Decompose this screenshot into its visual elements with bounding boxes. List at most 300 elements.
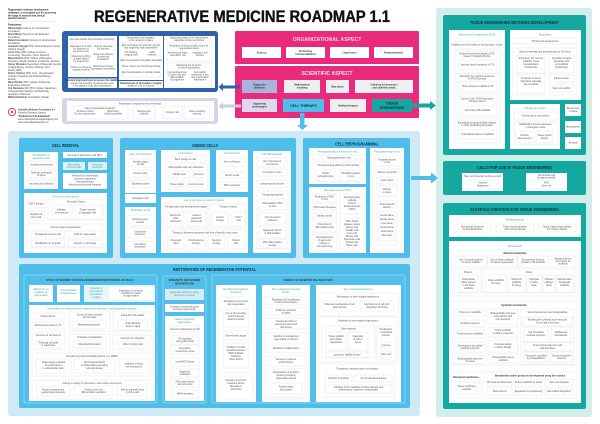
panel: cell reprogramming: Identity control xyxy=(317,214,332,218)
biomaterials: scaffolds xyxy=(498,360,508,362)
panel: tissue engineering background xyxy=(436,8,592,417)
panel: cell removal: Removal by mitochondria xyxy=(72,174,99,178)
sub-panel: therapy at effector level: Development of synthetic xyxy=(273,371,300,374)
panel: diagnostics: in the patient's body after implantation xyxy=(73,84,112,88)
sub-panel: epigenetic and genome reprogramming: for tissue regeneration xyxy=(173,308,197,311)
biomaterials: in tissue therapy xyxy=(495,346,512,349)
panel: diagnostics: Immunophenotype xyxy=(167,71,187,74)
panel: diagnostics: Monitoring of cell migration xyxy=(127,36,155,40)
biomaterials: scaffolds xyxy=(464,288,474,290)
panel: cell reprogramming: Muscle cells xyxy=(346,236,359,238)
sub-panel: therapy at effector level: organization xyxy=(330,341,343,344)
biomaterials: Biological membranes xyxy=(453,376,479,379)
panel: cell reprogramming: Factors in xyxy=(319,242,330,245)
sub-panel: study of rejuvenation factors: Reducing cell death xyxy=(38,342,59,344)
sub-panel: therapy at effector level: and EV-derived xyxy=(228,315,245,318)
sub-panel: epigenetic and genome reprogramming: RA signaling xyxy=(179,338,192,340)
panel: cell reprogramming: iPSC-based therapies xyxy=(313,206,337,209)
biomaterials: Tissue scaffolds xyxy=(495,330,512,332)
panel: adding cells: Cell differentiation xyxy=(262,153,283,156)
sub-panel: study of rejuvenation factors: Transport of metabolites xyxy=(77,336,103,339)
panel: tissue engineering methods: Bioprinting xyxy=(539,34,552,36)
panel: cell reprogramming: Blood cells xyxy=(346,245,358,247)
panel: cell removal: of senescent xyxy=(55,212,68,214)
sub-panel: therapy at effector level: MMP inhibitors xyxy=(228,352,244,355)
panel: adding cells: cells xyxy=(236,220,242,222)
biomaterials: for tissue xyxy=(465,360,475,363)
panel: cell reprogramming: Muscle tissue xyxy=(380,218,395,221)
panel: scientific aspect: Healing therapies xyxy=(338,104,359,108)
sub-panel: therapy at effector level: tissue factors xyxy=(229,358,244,361)
panel: cell reprogramming: to tissue xyxy=(383,191,392,194)
sidebar: authors and intro: University of Moscow) xyxy=(8,93,30,96)
panel: tissue engineering methods: New bio-materials and developments for 3D tissue xyxy=(519,50,571,54)
panel: adding cells: Therapy of diseases associated with loss of specific tissue types xyxy=(172,232,239,234)
panel: diagnostics: and functional activity of regenerative cells xyxy=(70,82,114,85)
panel: cell reprogramming: Reprogramming efficiency and specificity xyxy=(318,164,360,167)
panel: cell reprogramming: Vector types xyxy=(381,179,394,182)
panel: adding cells: Viability tests xyxy=(172,173,187,176)
panel: tissue engineering methods: Natural tissue engineering (NTE) xyxy=(459,34,495,36)
sub-panel: study of rejuvenation factors: Mechanical impacts on TF xyxy=(35,324,62,327)
panel: preparation of regenerative tools: Preparation of regions for the cell therapy xyxy=(119,102,162,106)
biomaterials: Natural polymers xyxy=(554,258,573,260)
panel: adding cells: Adult cells xyxy=(170,220,182,223)
footer: foundation logo and contact: Scientific Medicine Foundation for xyxy=(18,108,55,112)
panel: adding cells: Stem cell factors xyxy=(224,160,241,164)
panel: diagnostics: Monitoring the dynamics xyxy=(177,64,202,67)
panel: cells for use in tissue engineering: CELLS FOR USE IN TISSUE ENGINEERING xyxy=(477,165,552,170)
biomaterials: of cell, tissue functions xyxy=(536,322,560,324)
sub-panel: study of rejuvenation factors: condition on xyxy=(34,291,48,294)
sidebar: authors and intro: Russia) xyxy=(8,79,16,81)
panel: cells for use in tissue engineering: for patient-specific xyxy=(537,176,557,180)
panel: diagnostics: Single-cell analysis xyxy=(93,54,114,56)
sub-panel: therapy at effector level: of transplant xyxy=(380,331,393,334)
panel: scientific aspect: and synthetic media xyxy=(373,86,396,90)
decellularization: Decellularization xyxy=(506,218,525,222)
panel: adding cells: survival xyxy=(136,221,144,224)
biomaterials: Biomaterials xyxy=(508,245,523,248)
panel: cell removal: Removal of tissue xyxy=(67,200,86,204)
sub-panel: study of rejuvenation factors: Chronological factors xyxy=(84,361,106,364)
panel: cell removal: tumor cells xyxy=(30,216,42,219)
sub-panel: therapy at effector level: Secretory cytokines xyxy=(276,358,297,361)
panel: tissue engineering methods: Properties of tissue xyxy=(521,77,542,80)
panel: adding cells: Cell tests xyxy=(194,173,204,176)
panel: preparation of regenerative tools: systems xyxy=(193,112,202,116)
biomaterials: collagen xyxy=(545,282,554,284)
sub-panel: therapy at effector level: Use of microvesicles xyxy=(225,312,247,315)
panel: diagnostics: Tissue-on-chip and xyxy=(71,67,91,69)
panel: tissue engineering methods: Soft tissue NTE scaffolds xyxy=(465,109,491,112)
panel: scientific aspect: Data bases xyxy=(331,86,344,88)
biomaterials: for tissue regeneration xyxy=(491,261,514,264)
biomaterials: fibers xyxy=(546,284,553,287)
panel: scientific aspect: technologies xyxy=(252,106,268,108)
arrow: cell therapy to tissue engineering xyxy=(411,172,438,184)
panel: organizational aspect: ORGANIZATIONAL ASPECT xyxy=(293,37,362,43)
sub-panel: study of rejuvenation factors: Mitochondrial function xyxy=(78,343,101,346)
biomaterials: cells and tissue xyxy=(540,347,556,350)
panel: cell reprogramming: in vitro xyxy=(321,198,329,201)
sub-panel: therapy at effector level: integration with tissue xyxy=(366,306,389,309)
panel: cells for use in tissue engineering: iPSC xyxy=(544,182,549,184)
panel: cell removal: Tissue removal xyxy=(80,208,96,212)
biomaterials: in structural xyxy=(463,284,475,287)
panel: cell removal: Inhibition xyxy=(57,208,67,212)
sub-panel: study of rejuvenation factors: Change in activity of processes in stem niche environment xyxy=(62,382,122,385)
sub-panel: therapy at effector level: regenerative factors xyxy=(276,377,297,380)
sub-panel: therapy at effector level: Stem implant dependence xyxy=(343,288,373,291)
sidebar: authors and intro: roadmap is a conceptual tool for assessing xyxy=(8,12,56,14)
sub-panel: study of rejuvenation factors: STUDY OF RESIDENT FACTORS ON REGENERATIVE POTENTIAL OF CELLS xyxy=(46,279,134,282)
panel: cell reprogramming: iPSC-based xyxy=(346,221,359,223)
panel: cell removal: Depletion of xyxy=(30,213,42,216)
panel: cell reprogramming: Transdifferentiation xyxy=(341,172,361,175)
panel: cell reprogramming: Reprogramming xyxy=(316,236,333,239)
panel: tissue engineering methods: Enhancing: 3D, cell-free xyxy=(519,57,544,60)
biomaterials: Chitosan xyxy=(544,278,554,281)
panel: scientific aspect: Culturing in bioreactors xyxy=(370,84,398,86)
panel: tissue engineering methods: Control in cell, NOSS interaction xyxy=(461,98,494,100)
decellularization: Tissue engineering scaffolds xyxy=(543,226,572,228)
panel: tissue engineering methods: tissues / Scaffolds (Fuchs) xyxy=(464,55,491,58)
panel: cell removal: therapies xyxy=(92,166,103,169)
panel: adding cells: Epigenetic status xyxy=(132,182,150,186)
panel: scientific aspect: platforms xyxy=(254,86,266,90)
panel: cell reprogramming: in vivo xyxy=(384,162,391,164)
panel: tissue engineering methods: Tissue structure scaffolds in 3D xyxy=(462,85,494,88)
panel: adding cells: cells xyxy=(234,243,239,245)
sidebar: authors and intro xyxy=(8,8,62,99)
sub-panel: therapy at effector level: secreted proteins and xyxy=(275,323,298,326)
sub-panel: therapy at effector level: Mechanisms of stem implant dependence xyxy=(337,296,380,298)
sub-panel: epigenetic and genome reprogramming: Epigenetic factors in aging xyxy=(170,291,200,294)
sub-panel: therapy at effector level: Mechanisms xyxy=(380,329,393,331)
panel: restoration of regenerative potential: RESTORATION OF REGENERATIVE POTENTIAL xyxy=(173,267,256,272)
biomaterials: Biodegradable polymers xyxy=(491,312,516,315)
sub-panel: therapy at effector level: Therapeutic cosmetics stem cell implants xyxy=(336,368,379,370)
panel: diagnostics: New techniques of molecular, genetic xyxy=(122,44,161,47)
sub-panel: therapy at effector level: Stem-derived factors xyxy=(225,334,247,338)
panel: cell removal: of tumor cells xyxy=(67,166,82,169)
panel: cell removal: CELL REMOVAL xyxy=(52,143,79,148)
sidebar: authors and intro: Alexander Sprygin (PhD, Federal Research Center, xyxy=(8,45,61,48)
sidebar: authors and intro: Maria Shutova (PhD, Institute of Bioorganic xyxy=(8,57,53,60)
biomaterials: scaffolds xyxy=(462,389,472,391)
sub-panel: epigenetic and genome reprogramming: Epigenetic xyxy=(180,370,191,374)
footer: foundation logo and contact: elena.milova@scienceagainstaging.com xyxy=(18,118,58,121)
sub-panel: therapy at effector level: of cells in xyxy=(353,339,364,341)
sidebar: authors and intro: Marie Wlodek (PhD, Institute of Molecular xyxy=(8,81,51,84)
panel: adding cells: islets xyxy=(173,242,179,245)
biomaterials: polymers xyxy=(557,357,567,360)
panel: diagnostics: cell function xyxy=(97,48,110,50)
panel: diagnostics: function xyxy=(196,54,205,57)
panel: cell reprogramming: Reprogramming xyxy=(344,196,361,199)
sidebar: authors and intro: Regenerative medicine development xyxy=(8,8,49,12)
biomaterials: in tissue xyxy=(530,281,539,284)
panel: diagnostics: Cell viability xyxy=(194,71,207,74)
panel: adding cells: Growth factors xyxy=(224,152,241,155)
panel: tissue engineering methods: Genetic tissue and function xyxy=(522,114,550,118)
panel: adding cells: in differentiation xyxy=(264,232,281,235)
panel: diagnostics: organoid models xyxy=(73,68,90,72)
sidebar: authors and intro: Foundation) xyxy=(8,30,20,33)
biomaterials: Extracellular xyxy=(462,278,475,281)
panel: adding cells: Fetal xyxy=(173,217,179,220)
panel: diagnostics: of tissue regeneration xyxy=(178,66,201,70)
biomaterials: Biomaterials and/or protocols development using bio-science xyxy=(495,374,566,378)
biomaterials: for tissue scaffolds xyxy=(462,261,481,264)
sub-panel: therapy at effector level: and regeneration xyxy=(227,303,245,306)
arrow: to diagnostics xyxy=(218,83,240,91)
footer: foundation logo and contact: Scientific Research Support xyxy=(18,112,46,114)
panel: organizational aspect: commercialization xyxy=(295,53,316,56)
sub-panel: study of rejuvenation factors: Regenerative potential xyxy=(42,361,65,364)
panel: tissue engineering methods: Vascular tissue interaction: HCTA xyxy=(460,64,495,66)
biomaterials xyxy=(449,241,581,403)
biomaterials: Modifying the synthetic super-structure xyxy=(528,318,568,322)
sidebar: authors and intro: practice barriers. xyxy=(8,17,27,20)
panel: adding cells: in vitro xyxy=(269,205,277,208)
panel: tissue engineering methods: cell scaffolds xyxy=(555,64,569,66)
biomaterials: Natural matrix xyxy=(557,278,572,281)
decellularization: Biomaterials treatment xyxy=(461,226,484,228)
sub-panel: therapy at effector level: function xyxy=(382,334,391,337)
panel: diagnostics: monitoring in vivo xyxy=(191,74,210,76)
panel: preparation of regenerative tools: Immune cells xyxy=(166,112,180,114)
panel: cell therapy background xyxy=(8,131,420,416)
sub-panel: study of rejuvenation factors: cell resident xyxy=(89,290,103,293)
panel: adding cells: Cell conversion xyxy=(265,216,281,219)
biomaterials: scaffolds xyxy=(560,285,570,287)
panel: cells for use in tissue engineering: Non-human cells xyxy=(538,175,556,177)
biomaterials: Fibers xyxy=(526,271,533,274)
panel: cell reprogramming: Factors xyxy=(348,202,357,205)
panel: adding cells: therapy xyxy=(269,244,277,247)
sub-panel: therapy at effector level: Immune xyxy=(382,345,391,347)
sub-panel: therapy at effector level xyxy=(212,275,405,403)
biomaterials: Use of native scaffolds xyxy=(490,258,514,262)
sub-panel: therapy at effector level: Non-cytogenetic secreted xyxy=(272,288,301,291)
panel: tissue engineering methods: Inductor tissue xyxy=(554,77,570,80)
biomaterials: Polymers design xyxy=(495,343,512,346)
panel: diagnostics: regenerative status xyxy=(179,47,200,50)
sub-panel: study of rejuvenation factors: factor in aging xyxy=(126,325,141,328)
sidebar: authors and intro: of Aging Biology, Institute of Biology, Komi, xyxy=(8,66,51,69)
sub-panel: study of rejuvenation factors: and cell state xyxy=(83,316,97,319)
panel: adding cells: Tissue origins xyxy=(170,183,185,186)
sub-panel: study of rejuvenation factors: regenerative processes xyxy=(41,391,66,394)
panel: organizational aspect: Reimbursements xyxy=(384,52,404,54)
sub-panel: therapy at effector level: of aging xyxy=(282,312,291,314)
panel: diagnostics: and epigenetic state assessment xyxy=(124,46,158,50)
footer: foundation logo and contact xyxy=(8,108,58,124)
panel: adding cells: Genetic xyxy=(216,216,225,219)
sub-panel: epigenetic and genome reprogramming: Genomic proliferation (p. 53) xyxy=(170,328,200,331)
panel: cell removal: Elimination xyxy=(68,164,81,166)
sub-panel: epigenetic and genome reprogramming: regeneration xyxy=(177,321,192,324)
footer: foundation logo and contact: www.scienceagainstaging.com xyxy=(18,121,49,124)
decellularization: with minimal damage xyxy=(504,228,527,231)
panel: cell reprogramming: delivery xyxy=(383,206,392,209)
panel: adding cells: Specific origins xyxy=(133,160,149,164)
panel: cell removal: Cells for regeneration xyxy=(74,233,97,236)
panel: cell removal: Removal of cell clusters xyxy=(53,196,80,198)
sub-panel: therapy at effector level: and cellular xyxy=(330,338,342,341)
biomaterials: Tissue bio-ink xyxy=(492,391,507,393)
biomaterials: synthetic polymers xyxy=(460,347,480,350)
panel: cell reprogramming: Heart tissue xyxy=(381,230,394,233)
panel: diagnostics: imaging tools xyxy=(124,54,139,56)
panel: cells for use in tissue engineering: Epigenome xyxy=(477,186,490,188)
sub-panel: study of rejuvenation factors: of growth factors xyxy=(45,364,63,367)
sub-panel: study of rejuvenation factors: differentiation regulation xyxy=(81,391,106,394)
panel: adding cells: MSC secretome xyxy=(224,184,241,187)
panel: cell reprogramming: Neural cells xyxy=(346,226,359,229)
biomaterials: mechanic properties xyxy=(493,332,514,335)
panel: adding cells: therapy xyxy=(213,242,221,245)
panel: cell reprogramming: Liver tissue xyxy=(381,222,394,225)
panel: organizational aspect: Legal issues xyxy=(342,52,357,54)
panel: diagnostics: Molecular profiling xyxy=(72,55,91,58)
sub-panel: study of rejuvenation factors: cell senescence xyxy=(126,366,143,368)
panel: diagnostics: Tools for assessing cell quality and safety xyxy=(120,59,163,62)
biomaterials: biomaterials xyxy=(555,334,568,337)
biomaterials: Protein scaffolds for tissue xyxy=(515,381,543,384)
sub-panel: epigenetic and genome reprogramming: Regulating xyxy=(180,347,191,350)
panel: diagnostics: and regeneration xyxy=(191,76,209,79)
panel: diagnostics: Label xyxy=(149,52,155,54)
panel: adding cells: CAR-T xyxy=(235,216,243,219)
panel: adding cells: Retinal xyxy=(232,239,240,242)
panel: diagnostics: potential in vivo xyxy=(170,54,187,57)
sub-panel: therapy at effector level: therapies xyxy=(231,291,242,294)
panel: cell removal: Senolytic therapeutics xyxy=(30,164,54,166)
sub-panel: epigenetic and genome reprogramming: and tissue renewal xyxy=(174,294,195,297)
panel: adding cells: therapy xyxy=(192,242,201,245)
panel: diagnostics: of stem cells and xyxy=(168,74,186,76)
biomaterials: Biodegradable polymers xyxy=(458,358,483,360)
panel: tissue engineering methods: biomaterials xyxy=(525,66,538,69)
sub-panel: epigenetic and genome reprogramming: Insulin/IGF factors xyxy=(176,360,195,364)
panel: cell reprogramming: CELL REPROGRAMMING xyxy=(335,142,378,146)
sub-panel: therapy at effector level: Stem cell xyxy=(381,353,391,356)
panel: tissue engineering methods: Expanding interactional differentiation xyxy=(458,122,497,124)
panel: cell removal: CAR-T therapy xyxy=(28,202,44,206)
biomaterials: Silk fibroin xyxy=(511,278,523,281)
biomaterials: Synthetic polymers xyxy=(460,322,481,325)
sub-panel: therapy at effector level: tissue xyxy=(355,341,362,344)
sidebar: authors and intro: Participants: xyxy=(8,24,22,26)
sidebar: authors and intro: Russia, MIPT) xyxy=(8,70,23,72)
sub-panel: therapy at effector level: blood flow xyxy=(231,389,242,391)
panel: adding cells: Differentiation iPSC xyxy=(262,202,283,205)
panel: adding cells: Modulation of cell xyxy=(131,209,151,212)
biomaterials: Fibers scaffolds xyxy=(488,279,505,282)
biomaterials: Stem cell therapies xyxy=(549,381,570,384)
biomaterials: Development of scaffold xyxy=(458,344,483,348)
panel: restoration of regenerative potential xyxy=(19,264,410,408)
sub-panel: epigenetic and genome reprogramming: DNA repair factors xyxy=(176,380,195,384)
panel: cell reprogramming: Reprogramming in vivo xyxy=(327,156,352,160)
panel: cell reprogramming: Reprogramming cell potency in vivo xyxy=(318,150,358,154)
panel: scientific aspect: Mathematical xyxy=(294,84,310,86)
biomaterials: Tissue membrane xyxy=(457,385,476,388)
sidebar: authors and intro: Dmitry Trofimov (PhD, D.Sc., Vice Research xyxy=(8,72,54,75)
panel: cells for use in tissue engineering: Genome xyxy=(479,182,488,184)
sub-panel: therapy at effector level: factors xyxy=(282,291,290,294)
panel: cell removal: Immune organ transplantation xyxy=(50,226,81,229)
panel: tissue engineering methods: bioprinting materials xyxy=(521,80,542,83)
panel: cell reprogramming: Liver cells xyxy=(347,232,358,235)
panel: diagnostics: Diagnosing status of the regenerative xyxy=(170,36,209,40)
panel: cell removal: Anti-inflammatory xyxy=(76,180,95,184)
panel: diagnostics: quality of cells and tissues xyxy=(128,84,155,88)
panel: diagnostics: of molecular xyxy=(97,56,109,58)
panel: cell removal: Improving cell clearance xyxy=(29,182,55,186)
panel: cell reprogramming: Reprogramming of iPSC xyxy=(324,189,351,192)
sub-panel: therapy at effector level: graft survival xyxy=(333,306,346,309)
sub-panel: study of rejuvenation factors: regeneration xyxy=(34,294,49,297)
panel: diagnostics: Development of biomarkers of aging xyxy=(120,82,162,85)
panel: preparation of regenerative tools: scaffolds xyxy=(139,114,149,116)
panel: tissue engineering methods: Tissue growth xyxy=(537,134,552,137)
panel: diagnostics: New and improved tools to assess the stability xyxy=(65,79,119,82)
panel: tissue engineering methods: in NTE (Potential) xyxy=(468,78,486,80)
panel: cell reprogramming: Retinal cells xyxy=(346,241,359,244)
panel: diagnostics: by sequencing xyxy=(74,61,89,63)
sub-panel: therapy at effector level: Inhibition of matrix xyxy=(227,346,246,349)
sub-panel: epigenetic and genome reprogramming: and cell stress xyxy=(178,383,193,386)
panel: cell reprogramming: Skin tissue xyxy=(381,234,393,237)
biomaterials: Bio-scaffold integration xyxy=(547,390,571,393)
biomaterials: Stimuli-responsive xyxy=(552,354,572,358)
panel: tissue engineering methods: Stem cell scaffold xyxy=(553,87,571,90)
sub-panel: study of rejuvenation factors: of regeneration xyxy=(123,294,139,298)
panel: cell reprogramming: of aged cells xyxy=(318,240,332,242)
sub-panel: study of rejuvenation factors: Effects of growth factor xyxy=(121,388,144,392)
panel: cell removal: Modification of cell grafts xyxy=(35,242,61,245)
sub-panel: therapy at effector level: Induction of endogenous xyxy=(273,335,299,338)
panel: diagnostics: methods xyxy=(148,54,157,56)
sidebar: authors and intro: of Regenerative Medicine and Biotherapy, xyxy=(8,90,50,93)
panel: scientific aspect: Supporting xyxy=(253,102,266,106)
panel: tissue engineering methods: 3D tissue xyxy=(568,142,579,144)
panel: tissue engineering methods: Transgenic therapy xyxy=(524,107,546,110)
panel: adding cells: Stem cell properties xyxy=(129,153,152,156)
sidebar: authors and intro: Anton Titov (PhD, Institute of Cancer xyxy=(8,51,46,54)
panel: preparation of regenerative tools: Cellular assembly xyxy=(104,112,123,116)
sub-panel: study of rejuvenation factors: in aged tissue xyxy=(41,344,56,347)
sub-panel: therapy at effector level: Mediators of inflammation xyxy=(273,347,300,350)
sub-panel: therapy at effector level: treatment factors xyxy=(227,382,245,385)
biomaterials: Proteins xyxy=(464,271,473,274)
sub-panel: study of rejuvenation factors: Effects of cell xyxy=(34,288,49,291)
sub-panel: therapy at effector level: metalloproteinases xyxy=(226,349,246,352)
sub-panel: therapy at effector level: proteins mimicking xyxy=(276,374,296,377)
panel: diagnostics xyxy=(62,31,218,92)
panel: organizational aspect: Scale up xyxy=(257,52,267,54)
panel: scientific aspect: ENGINEERING xyxy=(380,106,405,110)
sub-panel: therapy at effector level: Stem implants xyxy=(341,328,357,330)
panel: diagnostics: Evaluation of tissue specific niches for xyxy=(170,44,209,48)
panel: cell removal: Removal of destructive cells (BLT) xyxy=(68,154,103,157)
panel: diagnostics: senescent cells xyxy=(73,50,90,53)
sub-panel: therapy at effector level: Trophic factors xyxy=(278,386,294,388)
